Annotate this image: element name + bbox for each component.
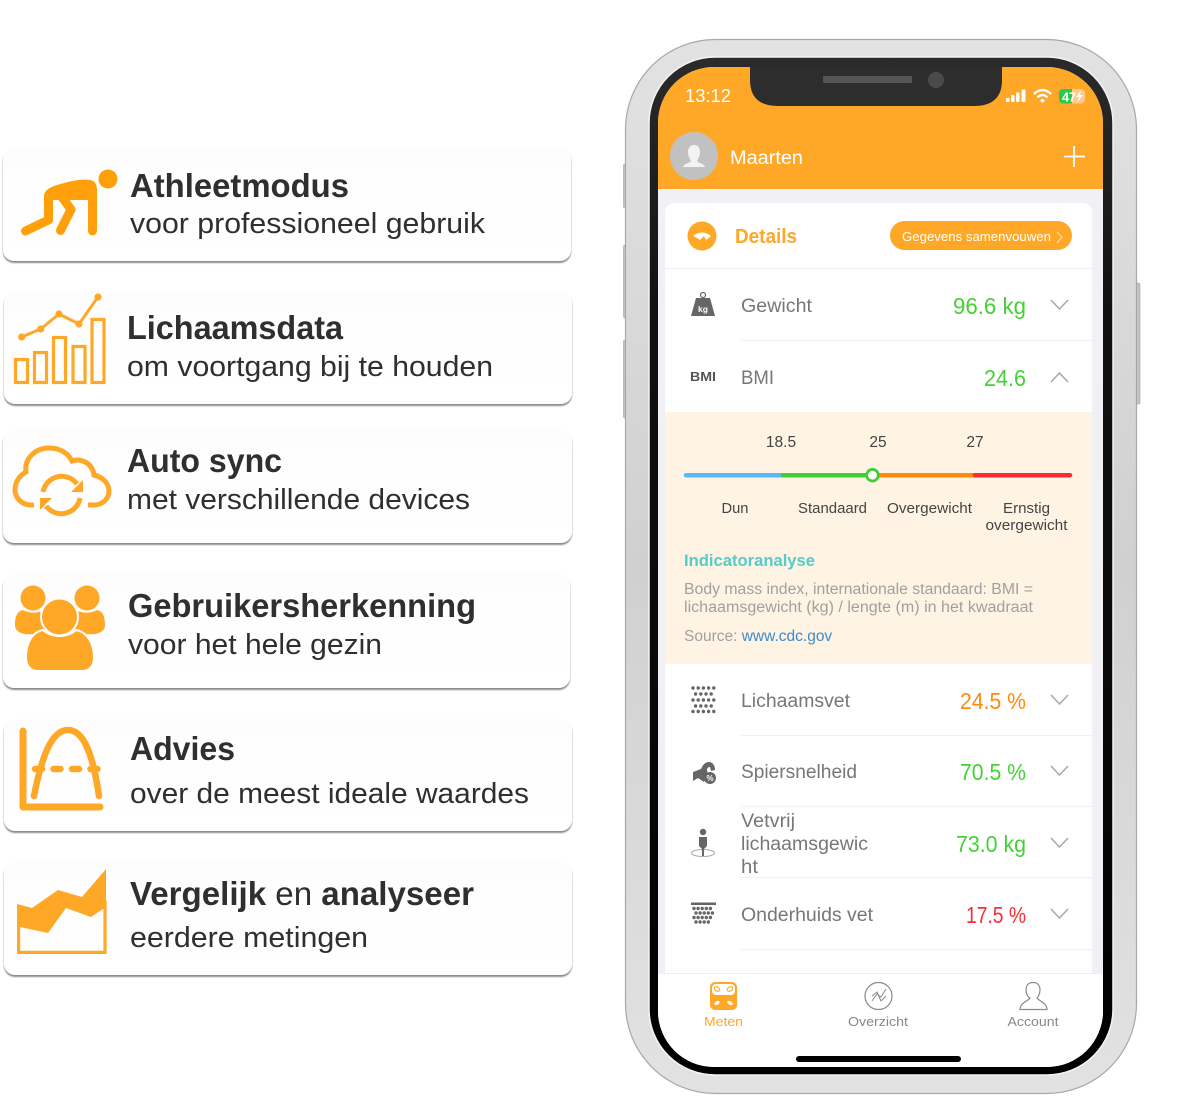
details icon	[688, 222, 716, 250]
app header	[658, 67, 1103, 189]
heading: Vergelijk en analyseer	[130, 875, 474, 912]
row: vetvrij lichaamsgewicht	[691, 813, 1068, 873]
panel: BMI detail	[665, 412, 1092, 664]
row: gewicht: Gewicht	[741, 296, 813, 317]
subheading: over de meest ideale waardes	[130, 778, 529, 810]
row: spiersnelheid: Spiersnelheid	[741, 762, 857, 783]
status time: 13:12	[685, 86, 731, 106]
row: BMI: BMI	[741, 368, 774, 389]
icon: group of users	[15, 586, 105, 671]
details heading: Details	[735, 226, 797, 248]
panel: auto sync	[3, 430, 572, 543]
icon: muscle: %	[706, 774, 714, 783]
scale values	[767, 436, 983, 447]
row: spiersnelheid: 70.5 %	[960, 759, 1026, 785]
panel: lichaamsdata	[4, 291, 572, 404]
row: vetvrij lichaamsgewicht: ht	[741, 857, 759, 878]
tab: meten: Meten	[704, 1014, 743, 1029]
row: BMI	[690, 370, 1068, 386]
heading: Advies	[130, 730, 235, 767]
tab bar	[658, 973, 1103, 1067]
icon: cloud sync	[15, 448, 109, 514]
plus icon	[1064, 146, 1085, 167]
icon: area chart	[17, 869, 106, 952]
icon: weight	[691, 292, 715, 316]
camera	[928, 72, 944, 88]
icon: BMI: BMI	[690, 369, 716, 384]
indicator description: lichaamsgewicht (kg) / lengte (m) in het kwadraat	[684, 599, 1034, 616]
scale values: 27	[966, 434, 984, 451]
status icons	[1006, 89, 1085, 104]
scale labels	[722, 501, 1068, 534]
scale labels: Standaard	[798, 501, 867, 517]
scale labels: Ernstig	[1003, 501, 1050, 517]
app screen	[658, 57, 1103, 1067]
speaker	[823, 76, 912, 83]
user name: Maarten	[730, 148, 803, 169]
tab: account: Account	[1008, 1014, 1059, 1029]
home indicator	[796, 1056, 961, 1062]
panel: vergelijk en analyseer	[4, 862, 572, 975]
row: onderhuids vet	[691, 902, 1068, 924]
tab: overzicht	[848, 982, 908, 1029]
phone mockup	[624, 40, 1140, 1094]
heading: Gebruikersherkenning	[128, 587, 476, 624]
scale values: 25	[869, 434, 887, 451]
tab: overzicht: Overzicht	[848, 1014, 908, 1029]
panel: athleetmodus	[3, 148, 571, 261]
heading: Athleetmodus	[130, 167, 349, 204]
tab: account	[1008, 982, 1059, 1029]
tab: meten	[705, 982, 742, 1026]
phone side buttons	[624, 164, 1140, 418]
subheading: voor professioneel gebruik	[130, 208, 486, 240]
row: gewicht: 96.6 kg	[953, 293, 1026, 319]
status icons: 47	[1062, 90, 1076, 104]
subheading: voor het hele gezin	[128, 629, 382, 661]
row: BMI: 24.6	[984, 365, 1026, 391]
row: gewicht	[691, 292, 1068, 319]
row: lichaamsvet: 24.5 %	[960, 688, 1026, 714]
indicator description: Body mass index, internationale standaard: BMI =	[684, 581, 1033, 598]
icon: bar chart with trend line	[16, 293, 104, 382]
indicator heading: Indicatoranalyse	[684, 551, 815, 570]
row: vetvrij lichaamsgewicht: 73.0 kg	[956, 831, 1026, 857]
scale labels: Overgewicht	[887, 501, 972, 517]
scale values: 18.5	[766, 434, 796, 451]
scale labels: overgewicht	[986, 518, 1068, 534]
subheading: om voortgang bij te houden	[127, 351, 493, 383]
row: vetvrij lichaamsgewicht: Vetvrij	[741, 811, 795, 832]
icon: athlete in starting position	[26, 170, 118, 231]
subheading: met verschillende devices	[127, 484, 470, 516]
heading: Lichaamsdata	[127, 309, 344, 346]
subheading: eerdere metingen	[130, 922, 368, 954]
heading: Auto sync	[127, 442, 282, 479]
avatar	[670, 132, 718, 180]
phone frame	[626, 40, 1136, 1094]
scale labels: Dun	[722, 501, 748, 517]
BMI slider	[686, 469, 1070, 481]
icon: bell curve chart	[23, 730, 102, 807]
row: lichaamsvet	[693, 688, 1068, 714]
collapse button: Gegevens samenvouwen	[902, 229, 1051, 244]
indicator description	[684, 581, 1034, 616]
row: vetvrij lichaamsgewicht: lichaamsgewic	[741, 834, 868, 855]
icon: dots	[693, 688, 716, 712]
icon: weight: kg	[698, 304, 708, 314]
icon: muscle	[693, 762, 716, 784]
row: spiersnelheid	[693, 762, 1068, 784]
collapse button	[890, 221, 1072, 250]
source: Source: www.cdc.gov	[684, 628, 832, 645]
panel: advies	[4, 719, 572, 831]
row: onderhuids vet: Onderhuids vet	[741, 905, 874, 926]
details card	[665, 203, 1092, 1003]
notch	[750, 67, 1002, 106]
icon: subcutaneous fat	[691, 902, 716, 922]
phone bezel	[649, 57, 1113, 1075]
row: onderhuids vet: 17.5 %	[966, 902, 1026, 928]
row: lichaamsvet: Lichaamsvet	[741, 691, 851, 712]
panel: gebruikersherkenning	[3, 574, 570, 688]
icon: person on scale	[692, 829, 714, 856]
